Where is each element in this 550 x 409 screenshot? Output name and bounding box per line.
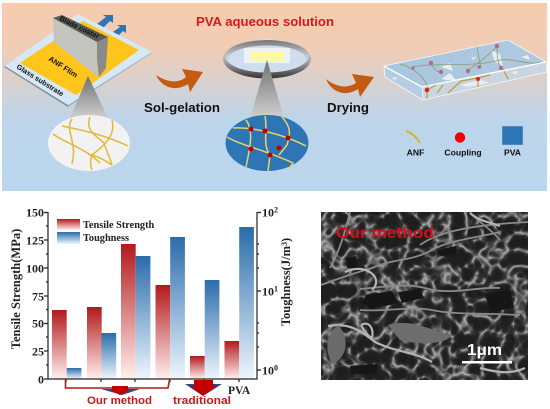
left axis tick labels: 25 <box>32 344 44 358</box>
icon: blade coater <box>53 15 108 77</box>
bars: toughness <box>67 227 254 379</box>
left axis title: Tensile Strength(MPa) <box>9 229 23 349</box>
left axis tick labels: 50 <box>32 316 44 330</box>
right axis tick labels: 10 <box>262 206 274 220</box>
icon: petri dish <box>223 40 311 78</box>
label: sol-gelation: Sol-gelation <box>144 100 220 115</box>
label: glass substrate: Glass substrate <box>15 62 65 98</box>
left axis tick labels: 100 <box>26 262 44 276</box>
legend: PVA <box>502 126 523 158</box>
icon: drying arrow <box>326 74 374 97</box>
bar chart: tensile strength and toughness <box>9 206 293 407</box>
left axis tick labels: 75 <box>32 290 44 304</box>
legend: PVA: PVA <box>504 148 521 158</box>
chart axes and ticks <box>44 212 261 382</box>
chart legend <box>57 219 155 244</box>
label: traditional: traditional <box>173 395 231 407</box>
right axis tick labels: 0 <box>274 364 278 372</box>
title: PVA aqueous solution: PVA aqueous solution <box>196 15 334 29</box>
label: PVA category: PVA <box>228 385 251 397</box>
icon: crosslinked network <box>226 115 308 171</box>
chart legend: Tensile Strength <box>83 220 155 231</box>
right axis title: ) <box>279 238 293 242</box>
legend: coupling: Coupling <box>444 148 482 158</box>
right axis title: 3 <box>280 242 289 246</box>
icon: glass substrate with ANF film <box>4 14 152 107</box>
scale bar: 1 µm <box>462 342 512 364</box>
bracket: our method <box>66 380 170 395</box>
panel: SEM micrograph <box>321 212 528 380</box>
right axis tick labels: 2 <box>274 206 278 214</box>
icon: sol-gelation arrow <box>156 69 203 92</box>
legend: coupling <box>444 132 482 158</box>
bars: tensile strength <box>52 244 239 379</box>
scale bar: 1 µm: 1μm <box>467 342 502 359</box>
panel: fabrication process <box>2 3 547 191</box>
left axis tick labels: 0 <box>38 372 44 386</box>
icon: blue arrows <box>97 15 126 39</box>
right axis tick labels: 10 <box>262 284 274 298</box>
arrow: traditional <box>185 380 222 396</box>
icon: composite film slab <box>384 40 547 100</box>
label: our method: Our method <box>87 395 152 407</box>
right axis tick labels <box>262 206 278 378</box>
label: ANF film: ANF Flim <box>47 54 80 80</box>
right axis title: Toughness(J/m <box>279 246 293 326</box>
label: drying: Drying <box>327 100 369 115</box>
icon: magnifier cone ANF <box>70 76 108 118</box>
chart legend: Toughness <box>83 233 129 244</box>
right axis tick labels: 1 <box>274 284 278 294</box>
left axis tick labels: 125 <box>26 234 44 248</box>
left axis tick labels: 150 <box>26 206 44 220</box>
right axis tick labels: 10 <box>262 364 274 378</box>
icon: ANF fibre network <box>48 115 130 171</box>
label: blade coater: Blade coater <box>58 14 101 41</box>
legend: ANF: ANF <box>407 148 424 158</box>
left axis tick labels <box>26 206 44 386</box>
label: our method: Our method <box>336 225 434 242</box>
icon: magnifier cone gel <box>250 60 284 118</box>
legend: ANF <box>406 131 424 158</box>
